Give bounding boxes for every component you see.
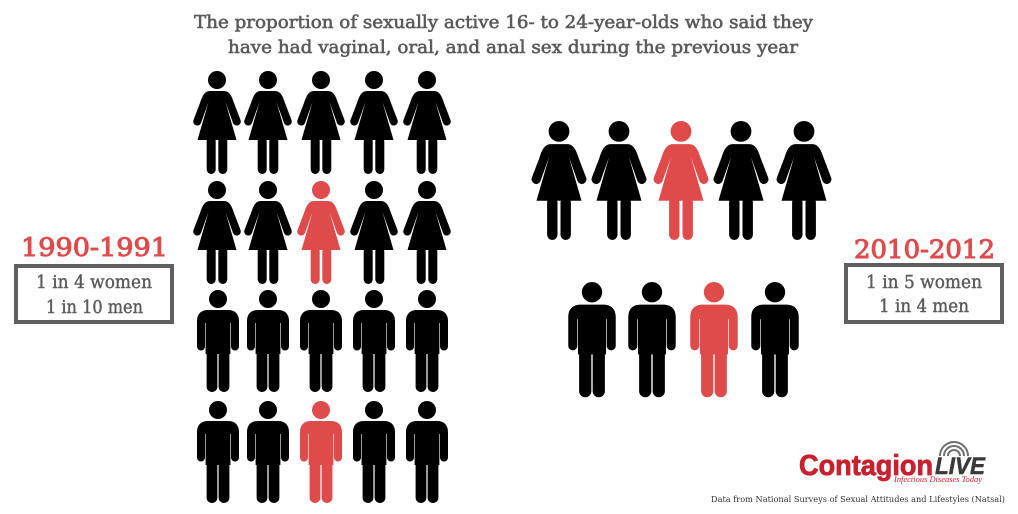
pictogram: 2010-2012 women, 1 in 5 highlighted bbox=[532, 121, 831, 240]
title: The proportion of sexually active 16- to 24-year-olds who said they bbox=[194, 12, 814, 33]
pictogram: 1990-1991 women, 1 in 4 highlighted bbox=[193, 71, 451, 284]
pictogram: 2010-2012 men, 1 in 4 highlighted bbox=[568, 282, 799, 397]
heading: 1990-1991: 1990-1991 bbox=[21, 233, 168, 262]
box frame bbox=[846, 265, 1002, 322]
stat: 1 in 10 men: 1 in 10 men bbox=[46, 298, 143, 318]
box frame bbox=[16, 266, 172, 322]
pictogram: 1990-1991 men, 1 in 10 highlighted bbox=[197, 290, 448, 503]
panel: 1990-1991 summary bbox=[16, 233, 172, 322]
logo: ContagionLive bbox=[799, 442, 986, 484]
stat: 1 in 4 women: 1 in 4 women bbox=[36, 273, 152, 293]
heading: 2010-2012: 2010-2012 bbox=[854, 235, 995, 264]
stat: 1 in 4 men: 1 in 4 men bbox=[879, 297, 969, 317]
logo wordmark: Contagion: Contagion bbox=[799, 450, 933, 482]
logo tagline: Infectious Diseases Today bbox=[893, 474, 982, 484]
logo wordmark: Live: LIVE bbox=[935, 453, 986, 480]
title: have had vaginal, oral, and anal sex during the previous year bbox=[228, 37, 798, 58]
panel: 2010-2012 summary bbox=[846, 235, 1002, 322]
source note: Data from National Surveys of Sexual Attitudes and Lifestyles (Natsal) bbox=[711, 495, 1005, 504]
title bbox=[194, 12, 814, 58]
stat: 1 in 5 women: 1 in 5 women bbox=[866, 273, 982, 293]
icon: signal arcs bbox=[940, 442, 968, 456]
